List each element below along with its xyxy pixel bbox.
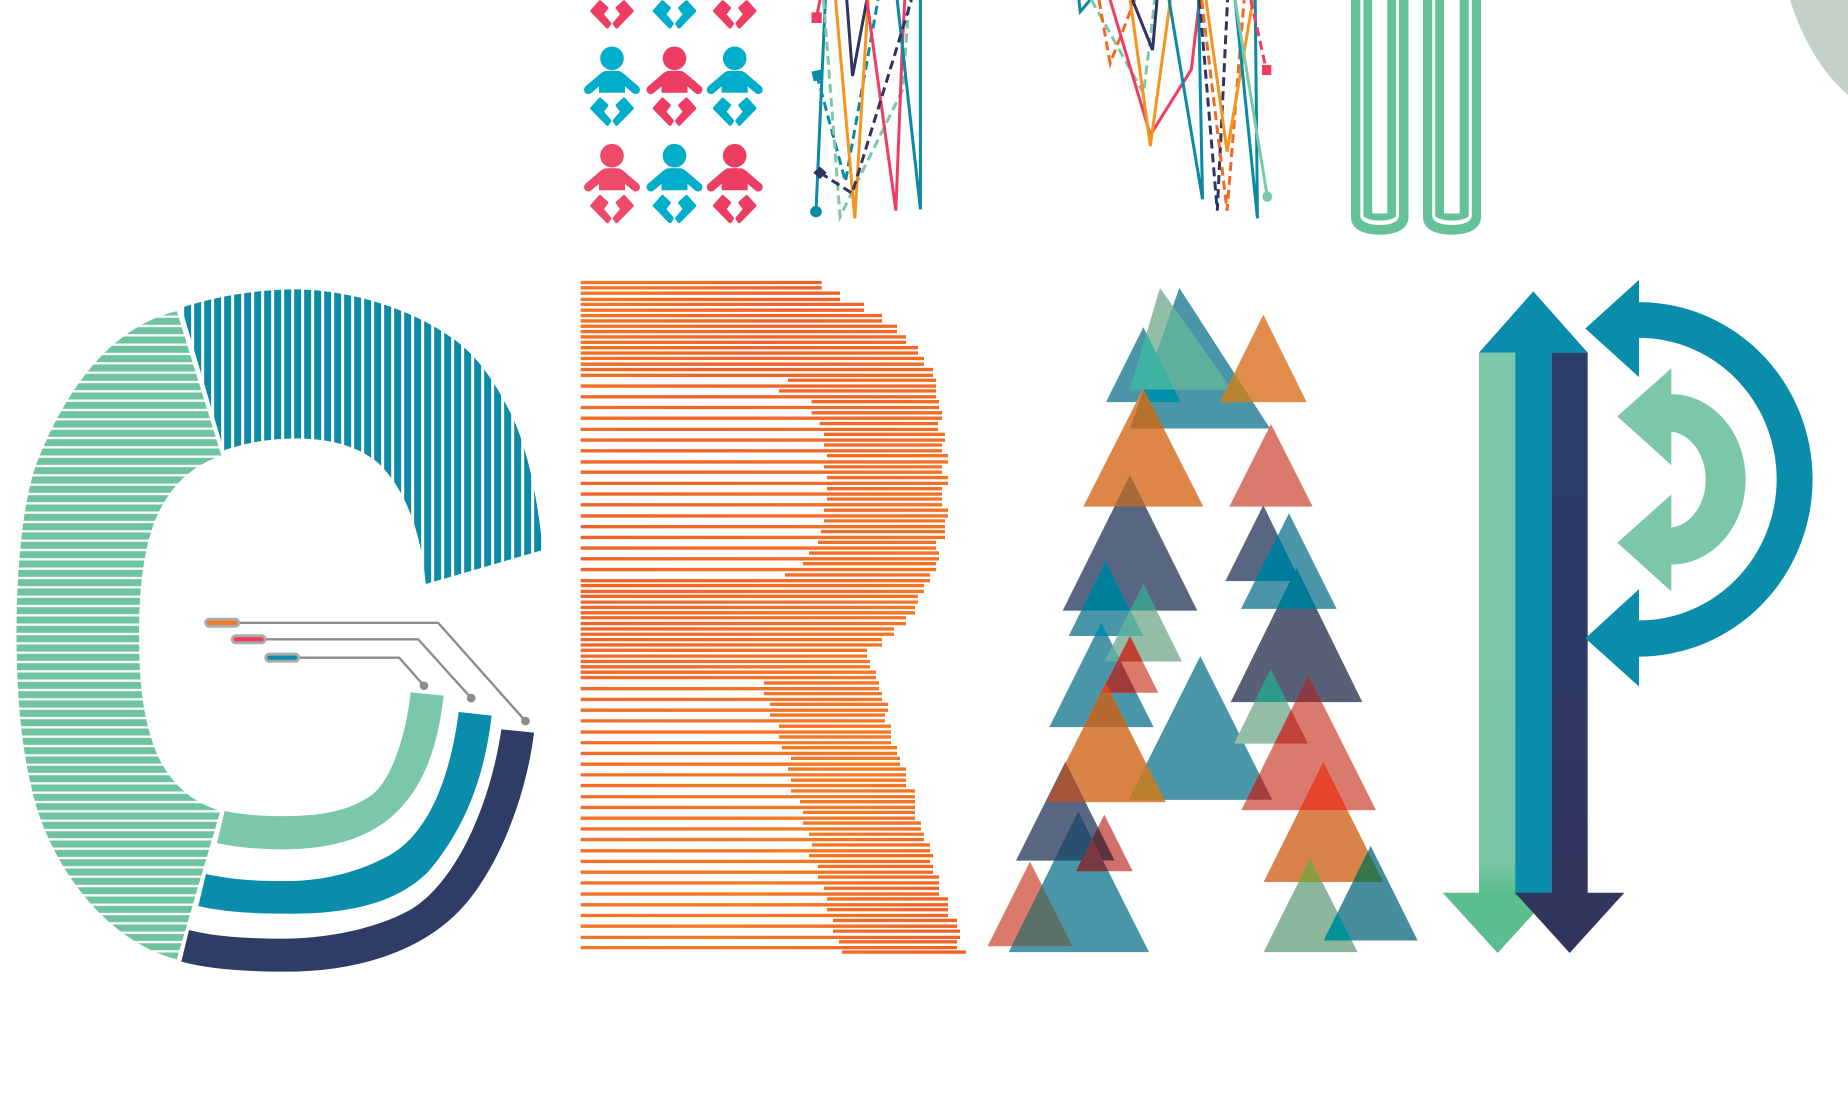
grey circle fragment, top right (1790, 0, 1848, 95)
line chart fragment: left cluster (810, 0, 920, 218)
arrow: teal up (1479, 291, 1588, 895)
baby row 0 (legs only) (588, 0, 758, 27)
baby row 1 (588, 46, 758, 124)
arrow: light green down (1443, 353, 1553, 953)
callout: pink key (232, 636, 476, 702)
tube left (1351, 0, 1408, 235)
G arc: navy (181, 729, 534, 972)
pictogram grid: babies (588, 0, 758, 222)
tube right (1423, 0, 1481, 235)
letter G (17, 289, 543, 972)
letter U: double outlined tubes (1351, 0, 1481, 235)
baby row 2 (588, 144, 758, 222)
G top: vertical stripes (182, 289, 543, 584)
line chart fragment: right cluster (1079, 0, 1272, 218)
letter R: stacked orange lines (581, 282, 966, 952)
G arc: teal (198, 712, 492, 914)
arrow: navy down (1515, 353, 1624, 953)
letter P: arrows (1443, 280, 1813, 953)
arrow: light green inner curve (1617, 368, 1746, 591)
G arc: light green (217, 692, 444, 849)
arrow: teal curved bowl (1585, 280, 1813, 686)
G left: horizontal stripes (17, 311, 222, 959)
letter A: overlapping triangles (988, 288, 1418, 952)
callout: teal key (266, 654, 428, 690)
callout: orange key (206, 619, 530, 725)
chart markers (1262, 65, 1272, 202)
triangle overlap tints (1012, 306, 1384, 946)
chart markers (810, 12, 827, 217)
base triangles (988, 288, 1418, 952)
